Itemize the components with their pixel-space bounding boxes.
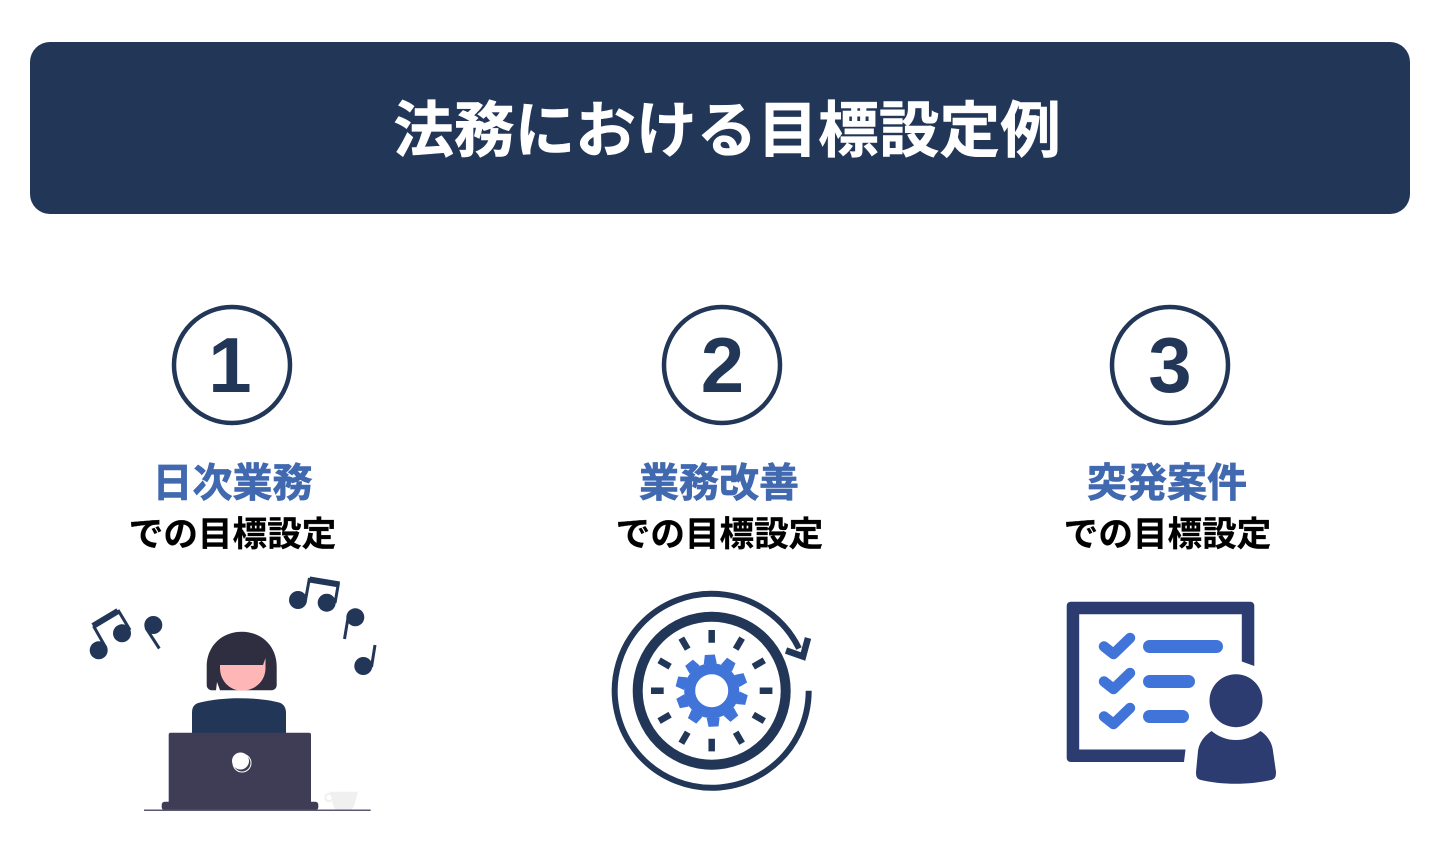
panel: process improvement — [615, 307, 823, 788]
icon: music notes right — [289, 578, 375, 675]
illustration: woman at laptop with music notes — [90, 578, 375, 811]
subheading: urgent matters: での目標設定 — [1064, 516, 1271, 554]
circular arrow — [615, 594, 809, 788]
laptop — [162, 733, 318, 810]
gear — [675, 654, 748, 727]
number badge 3: 3 — [1148, 321, 1192, 409]
icon: checklist with person — [1067, 602, 1276, 784]
number badge 1 — [174, 307, 290, 423]
checklist items — [1104, 638, 1216, 724]
number badge 1: 1 — [208, 321, 252, 409]
title banner — [30, 42, 1410, 214]
clock ticks — [651, 630, 772, 751]
person — [1196, 674, 1276, 784]
ground line — [144, 810, 371, 811]
subheading: daily work: での目標設定 — [129, 516, 336, 554]
panel: urgent matters — [1064, 307, 1276, 784]
heading: process improvement: 業務改善 — [639, 462, 799, 506]
heading: urgent matters: 突発案件 — [1087, 462, 1247, 506]
title: 法務における目標設定例 — [393, 96, 1061, 164]
number badge 2 — [664, 307, 780, 423]
coffee cup — [325, 792, 358, 810]
subheading: process improvement: での目標設定 — [616, 516, 823, 554]
panel: daily work — [90, 307, 375, 811]
icon: rotating gear — [615, 594, 809, 788]
number badge 3 — [1112, 307, 1228, 423]
person — [192, 632, 286, 733]
heading: daily work: 日次業務 — [152, 462, 312, 506]
icon: music notes left — [90, 610, 162, 659]
checklist frame — [1067, 602, 1254, 762]
number badge 2: 2 — [701, 321, 744, 409]
